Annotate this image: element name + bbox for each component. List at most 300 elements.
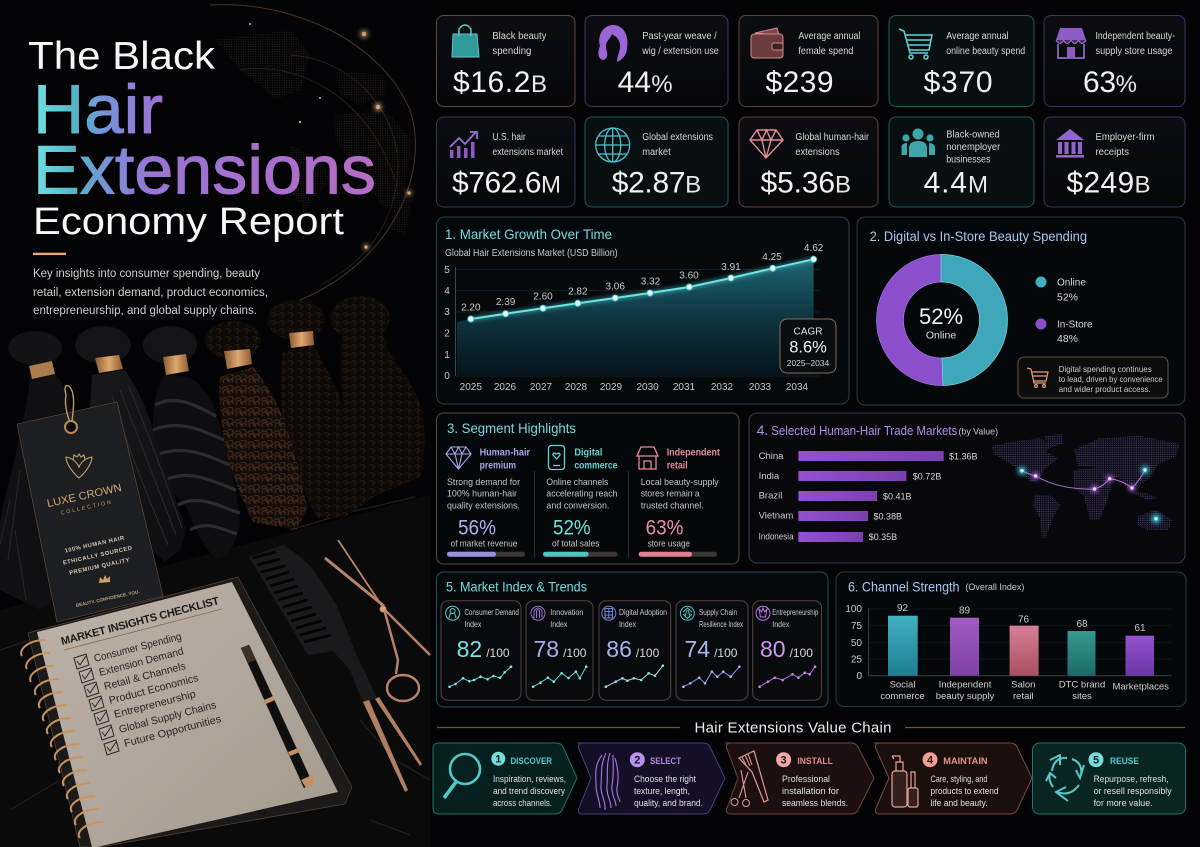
subhead xyxy=(667,448,721,472)
bar chart: $0.38B xyxy=(874,512,902,522)
step text: texture, length, xyxy=(634,786,690,797)
value: 82 /100 xyxy=(457,636,510,662)
marble table surface xyxy=(0,495,430,847)
y axis labels: 1 xyxy=(444,350,450,361)
step text xyxy=(493,774,566,809)
value chain step 4: maintain xyxy=(874,743,1032,814)
label xyxy=(641,31,719,57)
title xyxy=(28,35,376,243)
icon: diamond xyxy=(750,130,783,158)
KPI card: human-hair xyxy=(739,117,878,207)
step text: or resell responsibly xyxy=(1094,786,1172,797)
x axis labels xyxy=(460,382,809,393)
segment: human-hair xyxy=(446,447,530,557)
progress bar xyxy=(543,552,618,557)
KPI card: global extensions xyxy=(585,117,728,207)
value labels: 3.60 xyxy=(679,270,699,282)
bar chart xyxy=(845,603,1172,702)
value chain heading: Hair Extensions Value Chain xyxy=(694,720,892,736)
category labels: Salon xyxy=(1011,680,1035,690)
value labels: 2.82 xyxy=(568,286,588,298)
step name: DISCOVER xyxy=(510,756,552,767)
icon: diamond xyxy=(446,447,471,469)
heading: 2. Digital vs In-Store Beauty Spending xyxy=(870,228,1087,244)
icon: hair strands xyxy=(596,753,620,810)
heading qualifier: (Overall Index) xyxy=(965,582,1024,593)
icon: recycle loop xyxy=(1046,755,1084,801)
icon: bottles xyxy=(892,756,918,807)
step text: Choose the right xyxy=(634,774,696,785)
y axis labels: 25 xyxy=(851,654,862,666)
value labels: 89 xyxy=(959,606,970,616)
panel: trade markets xyxy=(749,413,1185,563)
bars xyxy=(888,616,1154,676)
value: 78 /100 xyxy=(534,636,587,662)
decorative marble veins xyxy=(0,497,430,835)
value labels: 76 xyxy=(1018,614,1029,626)
line glow xyxy=(471,259,814,319)
value: 44% xyxy=(618,66,673,99)
subhead xyxy=(574,448,618,472)
stat label: of market revenue xyxy=(451,538,517,550)
subhead: commerce xyxy=(574,460,618,472)
subhead: Digital xyxy=(574,448,603,459)
x axis labels: 2033 xyxy=(749,382,772,393)
sparkline xyxy=(760,667,815,687)
step number xyxy=(922,752,938,767)
label xyxy=(798,31,860,57)
index card: consumer demand xyxy=(441,601,521,700)
label: Supply Chain xyxy=(699,608,737,617)
panel: channel strength xyxy=(836,572,1186,706)
index card: innovation xyxy=(526,601,593,700)
label: wig / extension use xyxy=(641,46,719,57)
x axis labels: 2031 xyxy=(673,382,696,393)
checklist items: Entrepreneurship xyxy=(113,688,197,721)
segment: independent retail xyxy=(637,447,721,557)
tag eyelet xyxy=(65,421,77,433)
sparkline xyxy=(606,666,663,687)
description: quality extensions. xyxy=(447,500,520,512)
description: trusted channel. xyxy=(641,500,704,512)
label xyxy=(619,608,667,629)
label: Independent beauty- xyxy=(1096,31,1175,42)
stat label: store usage xyxy=(648,538,690,550)
title accent rule xyxy=(33,253,66,255)
location markers xyxy=(1018,466,1160,523)
legend: 48% xyxy=(1057,333,1078,345)
value labels: 3.91 xyxy=(721,262,741,273)
step text: across channels. xyxy=(493,798,552,809)
intro text: entrepreneurship, and global supply chains. xyxy=(33,305,257,317)
panel: market growth xyxy=(436,217,849,404)
category labels: commerce xyxy=(880,691,925,702)
label xyxy=(946,130,1001,166)
icon xyxy=(446,606,460,620)
spiral binding xyxy=(21,640,103,838)
step text: quality, and brand. xyxy=(634,798,703,809)
notebook paper xyxy=(37,582,338,847)
category labels: sites xyxy=(1072,691,1092,702)
step text: installation for xyxy=(782,786,839,797)
orbit arcs xyxy=(210,5,415,300)
label: online beauty spend xyxy=(946,46,1025,57)
stat: 52% xyxy=(553,516,591,540)
step number: 4 xyxy=(927,755,934,767)
title line 2: Hair xyxy=(33,71,163,148)
KPI card: nonemployer xyxy=(889,117,1034,207)
value chain step 3: install xyxy=(725,743,874,814)
intro text: Key insights into consumer spending, beauty xyxy=(33,268,260,280)
hair bundle 1: straight xyxy=(0,331,70,610)
value: 4.4M xyxy=(924,166,988,199)
x axis labels: 2034 xyxy=(786,382,809,393)
KPI card: U.S. market xyxy=(436,117,575,207)
checklist items: Consumer Spending xyxy=(93,631,183,665)
description: stores remain a xyxy=(641,488,700,500)
step number xyxy=(630,752,645,767)
hair bundle 2: straight xyxy=(75,326,186,562)
label: Resilience Index xyxy=(699,620,743,629)
heading: 1. Market Growth Over Time xyxy=(445,226,612,242)
icon: storefront xyxy=(637,447,658,469)
step number xyxy=(491,752,505,766)
bar chart: $0.35B xyxy=(869,532,897,542)
value: $249B xyxy=(1066,166,1150,199)
heading: 5. Market Index & Trends xyxy=(446,578,587,594)
checklist items xyxy=(93,631,223,750)
value labels: 4.62 xyxy=(804,243,824,254)
icon: bank xyxy=(1056,129,1084,158)
heading: 3. Segment Highlights xyxy=(447,420,576,436)
description: and conversion. xyxy=(546,500,609,512)
x axis labels: 2029 xyxy=(600,382,623,393)
description xyxy=(641,477,719,512)
icon: shopping bag xyxy=(452,25,479,57)
x axis labels: 2032 xyxy=(711,382,734,393)
KPI card: Black beauty spending xyxy=(436,16,575,106)
pen xyxy=(241,645,314,788)
y axis labels: 5 xyxy=(444,265,450,276)
subhead: premium xyxy=(480,460,516,472)
legend: In-Store xyxy=(1057,320,1093,330)
comb xyxy=(249,545,422,792)
CAGR callout: CAGR xyxy=(794,326,822,338)
note text: Digital spending continues xyxy=(1059,364,1152,374)
label: Entrepreneurship xyxy=(772,608,819,617)
dotted continents xyxy=(215,30,412,235)
icon: growth chart xyxy=(450,132,477,158)
icon xyxy=(531,606,545,620)
value chain step 2: select xyxy=(577,743,725,814)
label xyxy=(946,31,1025,57)
x axis labels: 2025 xyxy=(460,382,482,393)
brand crest xyxy=(66,454,92,478)
label: Global human-hair xyxy=(795,132,870,143)
label: receipts xyxy=(1096,147,1129,158)
x axis labels: 2028 xyxy=(565,382,588,393)
small crown xyxy=(99,575,110,583)
dotted continents xyxy=(992,434,1180,538)
world map xyxy=(992,434,1180,538)
label xyxy=(492,31,546,57)
value: $762.6M xyxy=(452,166,561,199)
label xyxy=(464,608,519,629)
chart subtitle: Global Hair Extensions Market (USD Billion) xyxy=(445,248,618,259)
y axis labels: 2 xyxy=(444,328,450,340)
x axis labels: 2030 xyxy=(636,382,659,393)
data points xyxy=(468,256,817,322)
value labels: 2.39 xyxy=(496,297,516,308)
left column photo scene xyxy=(0,296,430,847)
label xyxy=(772,608,819,629)
label: Innovation xyxy=(550,608,583,617)
tag loop xyxy=(65,386,74,425)
checklist items: Future Opportunities xyxy=(123,713,223,750)
bar chart: Indonesia xyxy=(759,532,794,542)
step text xyxy=(1094,774,1172,809)
heading qualifier: (by Value) xyxy=(958,426,998,438)
subhead: Independent xyxy=(667,448,721,459)
tag claims: PREMIUM QUALITY xyxy=(69,557,131,577)
description: 100% human-hair xyxy=(447,488,517,500)
gold city lights xyxy=(249,23,411,249)
brand name: LUXE CROWN xyxy=(46,482,123,510)
x axis labels: 2026 xyxy=(494,382,517,393)
value: 86 /100 xyxy=(606,636,660,662)
value: 63% xyxy=(1083,66,1137,99)
description: Online channels xyxy=(546,477,609,488)
hair bundle 5: kinky curly xyxy=(267,300,377,518)
intro text xyxy=(33,268,268,317)
step number: 1 xyxy=(495,754,501,766)
category labels: Social xyxy=(890,680,915,690)
heading: 6. Channel Strength xyxy=(848,578,960,594)
value: $2.87B xyxy=(612,166,701,199)
checklist items: Retail & Channels xyxy=(103,660,187,693)
area fill xyxy=(457,259,814,376)
value labels: 2.20 xyxy=(461,302,481,314)
label xyxy=(550,608,583,629)
value chain step 5: reuse xyxy=(1032,743,1186,814)
KPI card: female spend xyxy=(739,16,878,106)
value: $239 xyxy=(766,66,834,99)
label: U.S. hair xyxy=(492,132,526,143)
label: Past-year weave / xyxy=(642,31,717,42)
stat label: of total sales xyxy=(552,538,600,550)
label: Employer-firm xyxy=(1096,132,1154,143)
note text: to lead, driven by convenience xyxy=(1059,374,1163,384)
label xyxy=(699,608,743,629)
notebook cover xyxy=(28,577,352,847)
step text: Inspiration, reviews, xyxy=(493,774,566,785)
value labels: 3.32 xyxy=(641,276,661,288)
icon: phone xyxy=(548,446,564,470)
step text xyxy=(634,774,703,809)
bar chart: China xyxy=(759,451,784,462)
icon: store xyxy=(1056,28,1086,58)
label: Index xyxy=(619,620,636,629)
intro text: retail, extension demand, product economics, xyxy=(33,287,268,299)
step name: INSTALL xyxy=(797,756,833,767)
label: Index xyxy=(550,620,567,629)
panel: market index xyxy=(436,572,828,707)
value labels xyxy=(897,603,1146,634)
step number: 3 xyxy=(781,755,787,767)
icon: people xyxy=(902,128,935,157)
icon: cart xyxy=(899,29,932,59)
KPI card: weave use xyxy=(585,16,728,106)
checklist items: Product Economics xyxy=(108,672,200,707)
label xyxy=(1096,31,1175,57)
category labels: beauty supply xyxy=(936,691,995,702)
progress bar xyxy=(447,552,525,557)
category labels: Marketplaces xyxy=(1112,682,1169,692)
tag claims: ETHICALLY SOURCED xyxy=(62,545,133,567)
label xyxy=(1096,132,1154,158)
bar chart xyxy=(759,451,978,542)
hair bundle 6: kinky xyxy=(330,296,425,495)
value: $370 xyxy=(924,66,993,99)
label: businesses xyxy=(946,154,990,166)
category labels: Independent xyxy=(939,680,992,690)
step text xyxy=(782,774,848,809)
scissors xyxy=(325,540,430,701)
segment: digital commerce xyxy=(543,446,618,557)
y axis labels xyxy=(444,265,450,382)
y axis labels: 0 xyxy=(856,671,862,682)
value: $16.2B xyxy=(453,66,547,99)
line xyxy=(471,259,814,319)
label: Black-owned xyxy=(946,130,1000,140)
value: $5.36B xyxy=(760,166,851,199)
label: extensions xyxy=(795,147,840,158)
checklist items: Extension Demand xyxy=(98,645,185,679)
icon: comb and scissors xyxy=(731,751,768,806)
KPI card: employer receipts xyxy=(1044,117,1185,207)
donut chart xyxy=(876,254,1008,386)
step text: products to extend xyxy=(930,786,998,797)
step name: REUSE xyxy=(1110,756,1139,767)
y axis labels: 3 xyxy=(444,307,450,318)
note text: and wider product access. xyxy=(1059,384,1151,394)
step name: SELECT xyxy=(650,756,681,767)
step text: life and beauty. xyxy=(930,798,988,809)
legend xyxy=(1036,276,1093,345)
bar chart: $1.36B xyxy=(949,452,978,462)
label: Index xyxy=(772,620,789,629)
label: Average annual xyxy=(946,31,1009,42)
value: 74 /100 xyxy=(684,636,738,662)
note text xyxy=(1059,364,1163,394)
stat: 56% xyxy=(458,516,496,540)
donut chart: Online xyxy=(926,330,956,342)
y axis labels: 4 xyxy=(444,286,450,297)
description xyxy=(546,477,617,512)
step number xyxy=(1088,752,1104,767)
bar chart: $0.72B xyxy=(913,472,941,482)
heading rule xyxy=(64,609,222,650)
legend: Online xyxy=(1057,278,1086,288)
bar chart: $0.41B xyxy=(883,492,912,502)
label: supply store usage xyxy=(1096,46,1173,57)
index card: digital adoption xyxy=(599,601,671,700)
subhead: Human-hair xyxy=(480,448,530,459)
checklist items: Global Supply Chains xyxy=(118,699,218,736)
index card: supply chain xyxy=(676,601,748,700)
tag claims: 100% HUMAN HAIR xyxy=(64,535,126,555)
label xyxy=(642,132,713,158)
KPI card: online spend xyxy=(889,16,1034,106)
checkboxes xyxy=(74,654,119,755)
value labels: 3.06 xyxy=(605,282,625,292)
KPI card: supply store usage xyxy=(1044,16,1185,106)
stat: 63% xyxy=(646,516,683,540)
description: accelerating reach xyxy=(546,488,617,500)
hair bundle 3: wavy xyxy=(143,326,240,559)
notebook xyxy=(21,577,352,847)
bar chart: Brazil xyxy=(759,490,782,502)
trade route xyxy=(1022,470,1145,489)
tag claims xyxy=(62,535,133,577)
y axis labels: 0 xyxy=(444,371,450,382)
category labels: DTC brand xyxy=(1059,680,1105,690)
callout note xyxy=(1018,357,1168,398)
icon: wallet xyxy=(751,28,783,58)
icon xyxy=(602,606,616,620)
value labels: 68 xyxy=(1076,619,1088,630)
category labels: retail xyxy=(1013,691,1034,702)
value: 80 /100 xyxy=(760,636,813,662)
gridlines xyxy=(456,270,820,376)
progress bar xyxy=(639,552,717,557)
step text: for more value. xyxy=(1094,798,1153,809)
donut center label: 52% xyxy=(919,304,963,329)
label: female spend xyxy=(798,46,853,57)
label: Digital Adoption xyxy=(619,608,667,617)
step number xyxy=(776,752,791,767)
value labels: 4.25 xyxy=(762,252,782,263)
label: Global extensions xyxy=(642,132,713,143)
step name: MAINTAIN xyxy=(943,756,988,767)
bar chart: Vietnam xyxy=(759,510,793,522)
label: Consumer Demand xyxy=(464,608,519,617)
icon: globe xyxy=(596,128,630,162)
hair bundle 4: curly xyxy=(205,321,307,530)
dotted globe backdrop xyxy=(210,5,415,300)
label xyxy=(795,132,870,158)
description: Strong demand for xyxy=(447,477,520,488)
icon: wig xyxy=(598,25,627,62)
value chain step 1: discover xyxy=(433,743,577,814)
heading: 4.Selected Human-Hair Trade Markets xyxy=(757,422,957,438)
step text xyxy=(930,774,998,809)
step text: Repurpose, refresh, xyxy=(1094,774,1169,785)
label: market xyxy=(642,147,671,158)
CAGR callout: 8.6% xyxy=(789,338,827,356)
y axis labels: 100 xyxy=(845,604,862,615)
subhead xyxy=(480,448,530,472)
brand subtitle: COLLECTION xyxy=(60,499,113,517)
comb metal pin xyxy=(363,697,422,792)
index card: entrepreneurship xyxy=(753,601,822,700)
CAGR callout xyxy=(780,319,836,373)
label: Average annual xyxy=(798,31,860,42)
panel: digital vs in-store xyxy=(857,217,1185,405)
bar chart: India xyxy=(759,471,780,482)
step number: 5 xyxy=(1093,755,1099,767)
checklist heading: MARKET INSIGHTS CHECKLIST xyxy=(60,595,221,648)
